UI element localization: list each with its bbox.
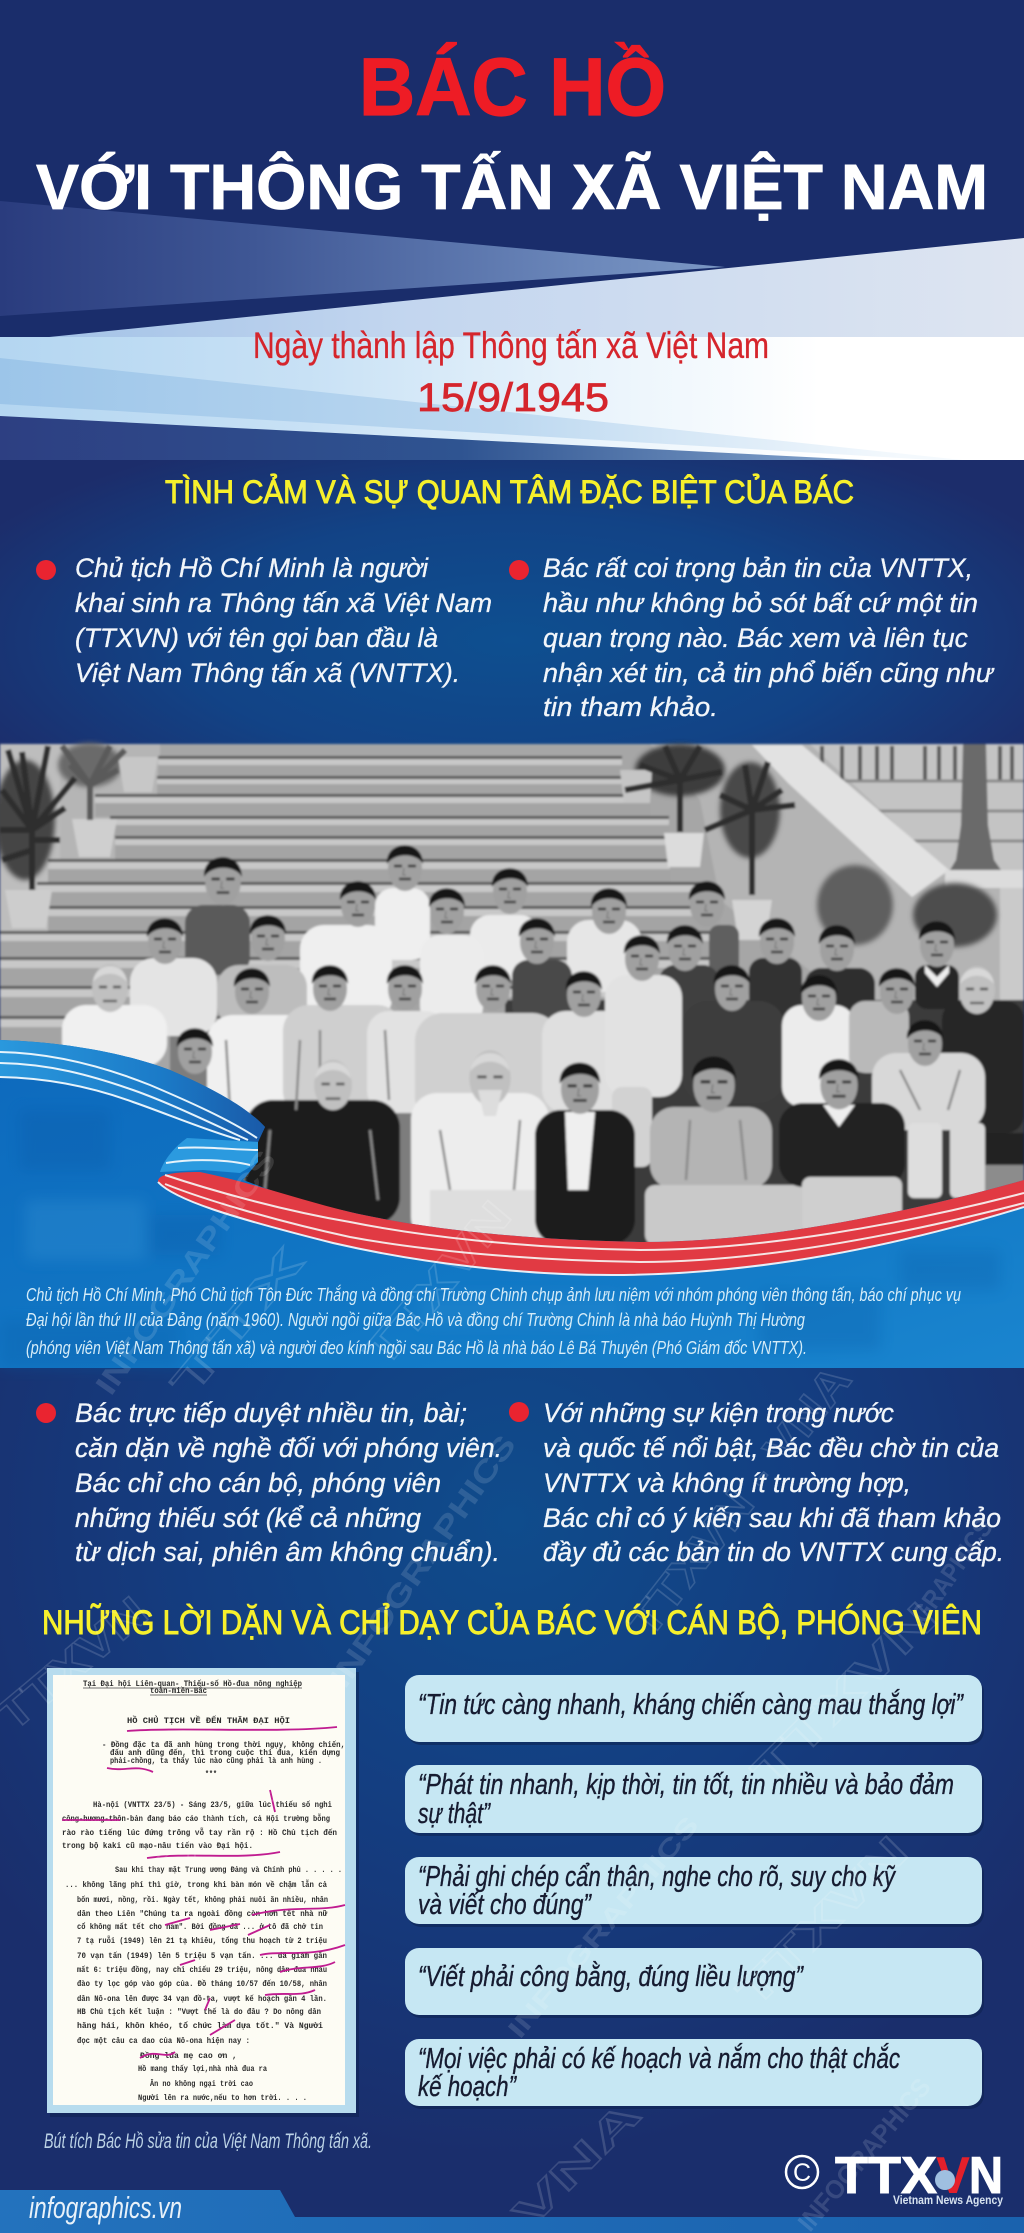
quote card 4: “Viết phải công bằng, đúng liều lượng” — [418, 1960, 804, 1993]
document: handwritten edits scan: Tại Đại hội Liên-quan- Thiếu-số Hồ-đua nông nghiệp — [83, 1679, 302, 1689]
text block: waited for agency news: và quốc tế nổi bật, Bác đều chờ tin của — [543, 1433, 999, 1463]
text block: valued the bulletins: nhận xét tin, cả tin phổ biến cũng như — [543, 658, 995, 688]
text block: valued the bulletins: quan trọng nào. Bác xem và liên tục — [543, 623, 968, 653]
document: handwritten edits scan: ... không lãng phí thì giờ, trong khi bàn món về chậm lẫn cả — [65, 1879, 327, 1890]
document: handwritten edits scan: - Đồng đặc ta đã anh hùng trong thời ngụy, không chiến, — [102, 1740, 345, 1750]
text block: valued the bulletins: Bác rất coi trọng bản tin của VNTTX, — [543, 553, 973, 583]
watermarks: TTXVN — [727, 1827, 918, 2017]
document: handwritten edits scan: rào rào tiếng lúc đứng trông vỗ tay rần rộ : Hồ Chủ tịch đến — [62, 1827, 337, 1838]
document: handwritten edits scan: Người lên ra nước,nếu to hơn trời. . . . — [138, 2093, 307, 2103]
logo: TTXVN: V — [936, 2147, 970, 2205]
photo: Uncle Ho with the reporters on the steps — [0, 743, 1024, 1284]
title — [36, 42, 988, 223]
text block: reviewed the news: từ dịch sai, phiên âm không chuẩn). — [75, 1537, 500, 1567]
document: handwritten edits scan: mất 6: triệu đồng, nay chỉ chiếu 29 triệu, nông dân đua nhau — [77, 1965, 327, 1975]
text block: valued the bulletins — [509, 553, 995, 722]
title: BÁC HỒ — [359, 42, 666, 133]
text block: valued the bulletins: hầu như không bỏ sót bất cứ một tin — [543, 588, 978, 618]
document: handwritten edits scan: *** — [205, 1769, 217, 1779]
quote card 3 — [405, 1857, 984, 1927]
logo: TTXVN — [786, 2147, 1004, 2207]
document: handwritten edits scan: phải-chồng, ta thấy lúc nào cũng phải là anh hùng . — [110, 1756, 322, 1766]
subtitle: founding date: Ngày thành lập Thông tấn xã Việt Nam — [253, 325, 769, 366]
text block: waited for agency news: Bác chỉ có ý kiến sau khi đã tham khảo — [543, 1503, 1001, 1533]
document: handwritten edits scan: Ăn no không ngại trời cao — [150, 2078, 253, 2089]
blue caption panel — [0, 1040, 1024, 1368]
document: handwritten edits scan: dân Nô-ona lên được 34 vạn đồ-ta, vượt kế hoạch gần 4 lần. — [77, 1994, 327, 2004]
document: handwritten edits scan: công-hương-thôn-bản đang báo cáo thành tích, cả Hội trường bỗng — [62, 1813, 330, 1824]
document: handwritten edits scan — [47, 1668, 359, 2117]
quote card 2 — [405, 1765, 984, 1836]
quote card 2: sự thật” — [418, 1798, 491, 1830]
document: handwritten edits scan: đào ty lọc góp vào góp của. Đồ tháng 10/57 đến 10/58, nhân — [77, 1979, 327, 1989]
document caption: Bút tích Bác Hồ sửa tin của Việt Nam Thông tấn xã. — [44, 2130, 372, 2153]
watermarks: TTX — [163, 1239, 313, 1406]
document: handwritten edits scan: dân theo Liên "Chúng ta ra ngoài đồng còn hơn tết nhà nữ — [77, 1909, 328, 1919]
text block: valued the bulletins: tin tham khảo. — [543, 692, 718, 722]
watermarks: TTXVN - VNA — [619, 1356, 861, 1646]
photo caption — [26, 1285, 961, 1358]
heading: section 1: TÌNH CẢM VÀ SỰ QUAN TÂM ĐẶC BIỆT CỦA BÁC — [165, 474, 854, 510]
subtitle: founding date: 15/9/1945 — [417, 376, 609, 420]
document: handwritten edits scan: bốn mươi, nồng, rồi. Ngày tết, không phải nuôi ăn nhiều, nhân — [77, 1895, 328, 1905]
subtitle: founding date — [253, 325, 769, 420]
text block: birth of agency: khai sinh ra Thông tấn xã Việt Nam — [75, 588, 492, 618]
document: handwritten edits scan: đọc một câu ca dao của Nô-ona hiện nay : — [77, 2036, 250, 2046]
text block: waited for agency news — [509, 1398, 1004, 1567]
document: handwritten edits scan: Sau khi thay mặt Trung ương Đảng và Chính phủ . . . . . — [115, 1865, 342, 1875]
document: handwritten edits scan: đấu anh dũng đến, thì trong cuộc thi đua, kiến dựng — [110, 1748, 340, 1758]
watermarks — [0, 1145, 999, 2233]
document: handwritten edits scan: 7 tạ ruỗi (1949) lên 21 tạ khiêu, tổng thu hoạch từ 2 triệu — [77, 1935, 327, 1946]
text block: waited for agency news: VNTTX và không ít trường hợp, — [543, 1468, 911, 1498]
watermarks: INFOGRAPHICS — [502, 1810, 705, 2044]
text block: birth of agency: (TTXVN) với tên gọi ban đầu là — [75, 623, 438, 653]
quote card 1 — [405, 1675, 984, 1745]
document: handwritten edits scan: HỒ CHỦ TỊCH VỀ ĐẾN THĂM ĐẠI HỘI — [127, 1715, 290, 1726]
document: handwritten edits scan: HB Chủ tịch kết luận : "Vượt thế là do đâu ? Do nông dân — [77, 2007, 321, 2017]
quote card 5: kế hoạch” — [418, 2071, 517, 2103]
text block: reviewed the news: Bác chỉ cho cán bộ, phóng viên — [75, 1468, 441, 1498]
watermarks: TTXVN — [742, 1593, 947, 1797]
watermarks: INFOGRAPHICS — [324, 1429, 523, 1694]
document: handwritten edits scan: 70 vạn tấn (1949) lên 5 triệu 5 vạn tấn. ... đã giảm gần — [77, 1951, 327, 1961]
logo: TTXVN: Vietnam News Agency — [893, 2195, 1004, 2207]
document: handwritten edits scan: Đồng lúa mẹ cao ơn , — [140, 2051, 237, 2061]
section background: lower panel — [0, 1368, 1024, 2233]
watermarks: GRAPHICS — [905, 1513, 999, 1628]
watermarks: INFOGRAPHICS — [792, 2072, 937, 2233]
watermarks: TTXVN — [105, 1762, 290, 1928]
footer website label: infographics.vn — [29, 2190, 182, 2225]
section background: top text panel — [0, 460, 1024, 750]
watermarks: TTXVN — [355, 1192, 521, 1376]
text block: waited for agency news: đầy đủ các bản tin do VNTTX cung cấp. — [543, 1537, 1004, 1567]
document: handwritten edits scan: cổ không mất tết cho nam". Bởi đồng đã ... ở-tô đã chở tin — [77, 1921, 323, 1932]
document: handwritten edits scan: hăng hái, khôn khéo, tổ chức làm dựa tốt." Và Người — [77, 2020, 323, 2031]
watermarks: INFOGRAPHICS — [90, 1145, 283, 1401]
document: handwritten edits scan: Hồ mang thấy lợi,nhà nhà đua ra — [138, 2064, 267, 2074]
ribbon: blue — [0, 1040, 265, 1173]
document: handwritten edits scan: toàn-miền-Bắc — [150, 1685, 207, 1696]
text block: reviewed the news: căn dặn về nghề đối với phóng viên. — [75, 1433, 502, 1463]
text block: birth of agency: Việt Nam Thông tấn xã (VNTTX). — [75, 658, 460, 688]
logo: TTXVN: TTX — [835, 2147, 937, 2205]
ribbon: red — [158, 1172, 1024, 1275]
quote card 5 — [405, 2039, 984, 2109]
logo: TTXVN: C — [793, 2159, 811, 2187]
footer band — [0, 2190, 1024, 2233]
document: handwritten edits scan: Hà-nội (VNTTX 23/5) - Sáng 23/5, giữa lúc thiếu số nghỉ — [93, 1800, 332, 1810]
title: VỚI THÔNG TẤN XÃ VIỆT NAM — [36, 150, 988, 223]
quote card 4 — [405, 1948, 984, 2018]
text block: birth of agency: Chủ tịch Hồ Chí Minh là người — [75, 553, 429, 583]
text block: waited for agency news: Với những sự kiện trong nước — [543, 1398, 894, 1428]
text block: birth of agency — [36, 553, 492, 688]
quote card 3: và viết cho đúng” — [418, 1889, 592, 1921]
document: handwritten edits scan: trong bộ kaki cũ mạo-nâu tiến vào Đại hội. — [62, 1841, 253, 1851]
text block: reviewed the news: những thiếu sót (kể cả những — [75, 1503, 421, 1533]
photo caption: (phóng viên Việt Nam Thông tấn xã) và người đeo kính ngồi sau Bác Hồ là nhà báo Lê Bá Thuyên (Phó Giám đốc VNTTX). — [26, 1338, 807, 1358]
text block: reviewed the news — [36, 1398, 502, 1567]
text block: reviewed the news: Bác trực tiếp duyệt nhiều tin, bài; — [75, 1398, 467, 1428]
logo: TTXVN: N — [969, 2147, 1003, 2205]
header banner with diagonal light bands — [0, 201, 1024, 470]
photo caption: Đại hội lần thứ III của Đảng (năm 1960). Người ngồi giữa Bác Hồ và đồng chí Trường Chinh là nhà báo Huỳnh Thị Hường — [26, 1310, 805, 1330]
